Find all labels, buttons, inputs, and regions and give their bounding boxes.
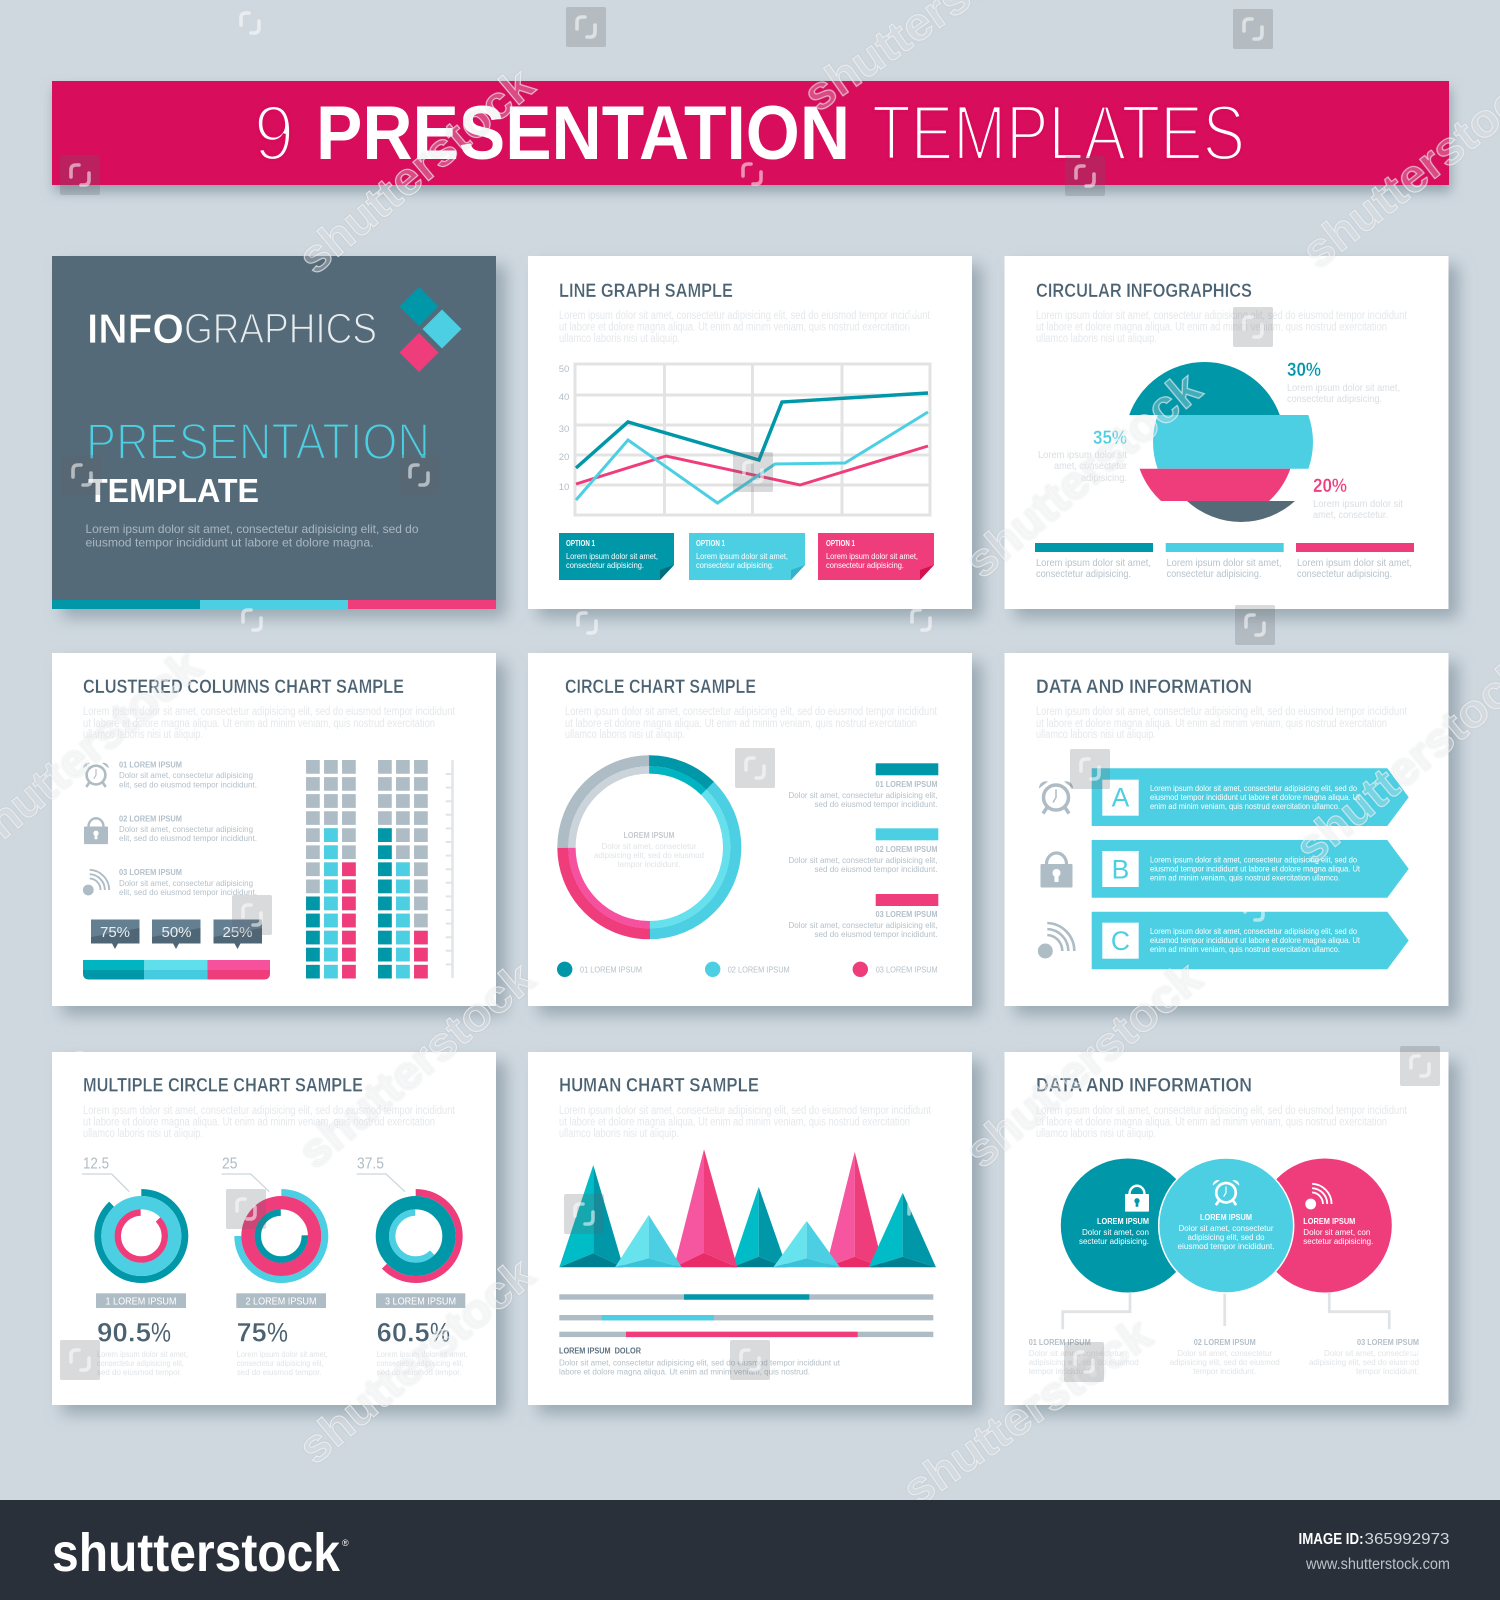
intro text: ut labore et dolore magna aliqua. Ut enim ad minim veniam, quis nostrud exercitation <box>559 1116 910 1128</box>
circle: cyan: adipisicing elit, sed do <box>1188 1233 1265 1242</box>
big percentages: % <box>151 1318 171 1348</box>
intro text: Lorem ipsum dolor sit amet, consectetur adipisicing elit, sed do eiusmod tempor incididunt <box>1036 310 1408 322</box>
arrow A <box>1092 768 1409 826</box>
donut centre text: tempor incididunt. <box>618 860 680 869</box>
percent tags: 75% <box>100 924 130 941</box>
option box 2 <box>689 533 805 580</box>
arrow C: Lorem ipsum dolor sit amet, consectetur adipisicing elit, sed do <box>1150 927 1358 936</box>
callout 20%: Lorem ipsum dolor sit <box>1313 498 1403 510</box>
title: 9 PRESENTATION TEMPLATES: TEMPLATES <box>872 88 1245 176</box>
arrow C: eiusmod tempor incididunt ut labore et dolore magna aliqua. Ut <box>1150 936 1361 945</box>
big percentages: 60.5 <box>377 1318 430 1348</box>
heading: LINE GRAPH SAMPLE <box>559 280 733 302</box>
option box 1: OPTION 1 <box>566 539 595 548</box>
heading: infographics <box>87 305 377 353</box>
legend bars with text: consectetur adipisicing. <box>1166 568 1262 580</box>
chart captions: consectetur adipisicing elit, <box>237 1359 324 1368</box>
clustered columns chart <box>313 760 421 981</box>
intro text: ullamco laboris nisi ut aliquip. <box>559 333 680 345</box>
arrow B: B <box>1112 854 1129 884</box>
circle: cyan: Dolor sit amet, consectetur <box>1178 1224 1274 1233</box>
intro text <box>565 706 938 741</box>
heading: MULTIPLE CIRCLE CHART SAMPLE <box>83 1075 363 1097</box>
bottom legend: 01 LOREM IPSUM <box>580 966 642 975</box>
callout 20% <box>1313 476 1403 521</box>
callout 35%: adipisicing. <box>1081 472 1127 484</box>
big percentages: 90.5 <box>97 1318 151 1348</box>
caption 03: adipisicing elit, sed do eiusmod <box>1309 1358 1419 1367</box>
intro text: ullamco laboris nisi ut aliquip. <box>1036 1128 1156 1140</box>
chart caption: LOREM IPSUM DOLOR <box>559 1346 641 1355</box>
legend bars with text: Lorem ipsum dolor sit amet, <box>1297 557 1412 569</box>
legend bars with text: consectetur adipisicing. <box>1036 568 1131 580</box>
caption 01: 01 LOREM IPSUM <box>1029 1338 1091 1347</box>
intro text: Lorem ipsum dolor sit amet, consectetur adipisicing elit, sed do eiusmod tempor incididunt <box>565 706 938 718</box>
arrow A: eiusmod tempor incididunt ut labore et dolore magna aliqua. Ut <box>1150 793 1361 802</box>
right legend item 01: 01 LOREM IPSUM <box>876 780 938 789</box>
list item 03: 03 LOREM IPSUM <box>119 868 182 877</box>
list item 02: Dolor sit amet, consectetur adipisicing <box>119 825 253 834</box>
right legend item 02: sed do eiusmod tempor incididunt. <box>814 865 938 874</box>
option box 3: consectetur adipisicing. <box>826 561 904 570</box>
list item 02: 02 LOREM IPSUM <box>119 814 182 824</box>
icon: lock <box>84 818 108 844</box>
big percentages: % <box>267 1318 288 1348</box>
option box 2: consectetur adipisicing. <box>696 561 774 570</box>
circle: pink: sectetur adipisicing. <box>1303 1237 1373 1246</box>
intro text: ullamco laboris nisi ut aliquip. <box>565 729 685 741</box>
percent tags <box>91 920 262 949</box>
intro text <box>559 1105 932 1140</box>
list item 01: elit, sed do eiusmod tempor incididunt. <box>119 780 257 790</box>
chart captions: sed do eiusmod tempor. <box>97 1368 182 1377</box>
option box 2: OPTION 1 <box>696 539 725 548</box>
panel: human chart <box>528 1052 972 1405</box>
chart captions: sed do eiusmod tempor. <box>237 1368 322 1377</box>
chart captions: Lorem ipsum dolor sit amet, <box>377 1350 468 1359</box>
circle: cyan: eiusmod tempor incididunt. <box>1178 1242 1274 1251</box>
option box 1: Lorem ipsum dolor sit amet, <box>566 552 658 561</box>
cover description: Lorem ipsum dolor sit amet, consectetur adipisicing elit, sed do <box>86 522 419 536</box>
list item 01: Dolor sit amet, consectetur adipisicing <box>119 771 253 780</box>
option box 3: Lorem ipsum dolor sit amet, <box>826 552 918 561</box>
circle: teal <box>1061 1158 1195 1292</box>
stacked progress bar <box>83 960 270 980</box>
icon: lock <box>1040 853 1072 888</box>
circle: pink: LOREM IPSUM <box>1303 1217 1356 1226</box>
cover description: eiusmod tempor incididunt ut labore et dolore magna. <box>86 536 374 550</box>
list item 03: elit, sed do eiusmod tempor incididunt. <box>119 888 257 897</box>
title banner <box>52 81 1449 185</box>
footer bar <box>0 1500 1500 1600</box>
connector lines <box>1063 1293 1389 1329</box>
intro text <box>83 1105 456 1140</box>
circle: pink <box>1258 1158 1392 1292</box>
right legend item 01 <box>788 763 938 809</box>
circle: pink: Dolor sit amet, con <box>1303 1228 1370 1237</box>
right legend item 03 <box>788 894 938 939</box>
circle: teal: LOREM IPSUM <box>1097 1217 1149 1226</box>
chart caption: labore et dolore magna aliqua. Ut enim ad minim veniam, quis nostrud. <box>559 1368 810 1377</box>
icon: clock <box>1039 781 1073 814</box>
panel: clustered columns chart <box>52 653 496 1006</box>
caption 03: 03 LOREM IPSUM <box>1357 1338 1419 1347</box>
icon: wifi <box>83 870 109 895</box>
caption 02 <box>1170 1338 1280 1376</box>
circle: teal: sectetur adipisicing. <box>1079 1237 1149 1246</box>
caption 01: tempor incididunt. <box>1029 1367 1092 1376</box>
cover colour stripe <box>52 600 496 609</box>
line chart: 10 <box>559 482 569 493</box>
donut chart <box>527 725 772 970</box>
callout 30%: 30% <box>1287 360 1321 381</box>
big percentages: % <box>430 1318 450 1348</box>
callout 35%: amet, consectetur <box>1054 460 1127 472</box>
legend bars with text <box>1035 543 1414 580</box>
intro text: Lorem ipsum dolor sit amet, consectetur adipisicing elit, sed do eiusmod tempor incididunt <box>559 310 931 322</box>
line chart: 30 <box>559 424 569 435</box>
title: 9 PRESENTATION TEMPLATES: PRESENTATION <box>316 91 850 176</box>
range bars <box>559 1294 933 1337</box>
footer image id <box>1298 1531 1450 1573</box>
callout 30% <box>1287 360 1400 405</box>
callout 35% <box>1038 428 1127 484</box>
caption 01 <box>1029 1338 1139 1376</box>
title: 9 PRESENTATION TEMPLATES <box>254 88 1245 176</box>
intro text: ut labore et dolore magna aliqua. Ut enim ad minim veniam, quis nostrud exercitation <box>1036 718 1387 730</box>
chart captions: consectetur adipisicing elit, <box>377 1359 464 1368</box>
chart captions: Lorem ipsum dolor sit amet, <box>237 1350 328 1359</box>
caption 02: tempor incididunt. <box>1193 1367 1256 1376</box>
panel: data and information arrows <box>1004 653 1448 1006</box>
line chart: 40 <box>559 392 569 403</box>
circle: cyan <box>1159 1158 1294 1293</box>
heading: CIRCULAR INFOGRAPHICS <box>1036 280 1252 302</box>
bottom legend <box>557 962 938 977</box>
ring chart 1 <box>98 1192 185 1280</box>
heading: infographics: INFO <box>87 305 184 352</box>
heading: DATA AND INFORMATION <box>1036 1075 1252 1097</box>
intro text <box>83 706 456 741</box>
big percentages <box>97 1318 450 1348</box>
intro text: ullamco laboris nisi ut aliquip. <box>83 729 203 741</box>
watermark text overlay: shutterstock <box>288 57 544 284</box>
intro text: ullamco laboris nisi ut aliquip. <box>1036 729 1156 741</box>
watermark text overlay: shutterstock <box>955 361 1211 588</box>
caption 02: Dolor sit amet, consectetur <box>1177 1349 1273 1358</box>
option box 3: OPTION 1 <box>826 539 855 548</box>
option box 2: Lorem ipsum dolor sit amet, <box>696 552 788 561</box>
chart labels: 2 LOREM IPSUM <box>246 1296 316 1308</box>
list item 01: 01 LOREM IPSUM <box>119 760 182 770</box>
caption 02: 02 LOREM IPSUM <box>1194 1338 1256 1347</box>
arrow B: Lorem ipsum dolor sit amet, consectetur adipisicing elit, sed do <box>1150 855 1358 864</box>
chart captions: Lorem ipsum dolor sit amet, <box>97 1350 188 1359</box>
pyramid chart <box>559 1149 936 1267</box>
option box 3 <box>818 533 934 580</box>
value labels with leaders <box>82 1156 405 1192</box>
panel: circular infographics <box>1004 256 1448 609</box>
watermark text overlay: shutterstock <box>955 951 1211 1178</box>
title: 9 PRESENTATION TEMPLATES: 9 <box>254 88 294 176</box>
percent tags: 25% <box>222 924 253 941</box>
heading: presentation: PRESENTATION <box>86 413 430 470</box>
panel: multiple circle chart <box>52 1052 496 1405</box>
donut centre text: Dolor sit amet, consectetur <box>602 842 697 851</box>
panel: data and information circles <box>1004 1052 1448 1405</box>
bottom legend: 03 LOREM IPSUM <box>876 966 938 975</box>
value labels with leaders: 12.5 <box>83 1156 109 1172</box>
callout 20%: 20% <box>1313 476 1347 497</box>
line chart: 20 <box>559 452 569 463</box>
circle: teal: Dolor sit amet, con <box>1082 1228 1149 1237</box>
legend bars with text: consectetur adipisicing. <box>1297 568 1392 580</box>
option box 1 <box>559 533 674 580</box>
footer logo: shutterstock <box>52 1523 341 1583</box>
callout 20%: amet, consectetur. <box>1313 509 1388 521</box>
intro text: ut labore et dolore magna aliqua. Ut enim ad minim veniam, quis nostrud exercitation <box>1036 1116 1387 1128</box>
intro text: Lorem ipsum dolor sit amet, consectetur adipisicing elit, sed do eiusmod tempor incididunt <box>559 1105 932 1117</box>
panel: circle chart <box>527 653 972 1006</box>
intro text: ut labore et dolore magna aliqua. Ut enim ad minim veniam, quis nostrud exercitation <box>83 1116 435 1128</box>
watermark text overlay: shutterstock <box>288 1247 544 1474</box>
caption 03: tempor incididunt. <box>1356 1367 1419 1376</box>
panel: line graph <box>528 256 972 609</box>
line chart: 50 <box>559 364 569 375</box>
chart captions: sed do eiusmod tempor. <box>377 1368 462 1377</box>
callout 30%: Lorem ipsum dolor sit amet, <box>1287 382 1400 394</box>
intro text <box>559 310 931 345</box>
donut centre text: LOREM IPSUM <box>624 831 675 840</box>
percent tags: 50% <box>161 924 192 941</box>
caption 03 <box>1309 1338 1419 1376</box>
list item 02 <box>119 814 257 843</box>
intro text: ut labore et dolore magna aliqua. Ut enim ad minim veniam, quis nostrud exercitation <box>83 718 435 730</box>
icon: clock <box>83 763 109 787</box>
chart caption: Dolor sit amet, consectetur adipisicing elit, sed do eiusmod tempor incididunt ut <box>559 1359 841 1368</box>
footer image id: www.shutterstock.com <box>1305 1556 1450 1573</box>
intro text: ullamco laboris nisi ut aliquip. <box>559 1128 679 1140</box>
chart labels <box>96 1293 465 1308</box>
chart labels: 1 LOREM IPSUM <box>106 1296 176 1308</box>
intro text: ullamco laboris nisi ut aliquip. <box>1036 333 1157 345</box>
ring chart 3 <box>372 1192 459 1280</box>
arrow A: A <box>1112 783 1130 813</box>
watermark text overlay: shutterstock <box>288 951 544 1178</box>
intro text: Lorem ipsum dolor sit amet, consectetur adipisicing elit, sed do eiusmod tempor incididunt <box>83 706 456 718</box>
heading: template: TEMPLATE <box>88 473 259 510</box>
caption 01: adipisicing elit, sed do eiusmod <box>1029 1358 1139 1367</box>
heading: infographics: GRAPHICS <box>184 305 377 353</box>
intro text: ut labore et dolore magna aliqua. Ut enim ad minim veniam, quis nostrud exercitation <box>559 322 910 334</box>
intro text <box>1036 310 1408 345</box>
arrow A: enim ad minim veniam, quis nostrud exercitation ullamco. <box>1150 802 1340 811</box>
right legend item 03: Dolor sit amet, consectetur adipisicing elit, <box>788 921 938 930</box>
panel: cover slide <box>52 256 496 609</box>
footer image id: 365992973 <box>1364 1531 1450 1548</box>
right legend item 01: Dolor sit amet, consectetur adipisicing elit, <box>788 791 938 800</box>
chart captions <box>97 1350 468 1377</box>
right legend item 02: 02 LOREM IPSUM <box>876 845 938 854</box>
intro text <box>1036 1105 1408 1140</box>
list item 01 <box>119 760 257 790</box>
watermark squares and marks <box>60 7 1440 1382</box>
callout 30%: consectetur adipisicing. <box>1287 393 1382 405</box>
intro text: Lorem ipsum dolor sit amet, consectetur adipisicing elit, sed do eiusmod tempor incididunt <box>1036 706 1408 718</box>
caption 03: Dolor sit amet, consectetur <box>1324 1349 1419 1358</box>
intro text: ullamco laboris nisi ut aliquip. <box>83 1128 203 1140</box>
arrow C: enim ad minim veniam, quis nostrud exercitation ullamco. <box>1150 945 1340 954</box>
chart scale <box>449 760 452 978</box>
big percentages: 75 <box>237 1318 267 1348</box>
icon: wifi <box>1038 923 1074 958</box>
chart caption <box>559 1346 841 1377</box>
circle: cyan: LOREM IPSUM <box>1200 1213 1252 1222</box>
option box 1: consectetur adipisicing. <box>566 561 644 570</box>
sliced circle chart <box>1129 362 1313 522</box>
icon: diamonds <box>400 287 462 372</box>
cover description <box>86 522 419 550</box>
chart captions: consectetur adipisicing elit, <box>97 1359 184 1368</box>
donut centre text: adipisicing elit, sed do eiusmod <box>594 851 704 860</box>
callout 35%: 35% <box>1093 428 1127 449</box>
legend bars with text: Lorem ipsum dolor sit amet, <box>1036 557 1151 569</box>
right legend item 03: sed do eiusmod tempor incididunt. <box>814 930 938 939</box>
arrow B: enim ad minim veniam, quis nostrud exercitation ullamco. <box>1150 873 1340 882</box>
intro text <box>1036 706 1408 741</box>
right legend item 03: 03 LOREM IPSUM <box>876 910 938 919</box>
callout 35%: Lorem ipsum dolor sit <box>1038 449 1127 461</box>
caption 01: Dolor sit amet, consectetur <box>1029 1349 1124 1358</box>
right legend item 02 <box>788 828 938 874</box>
list item 02: elit, sed do eiusmod tempor incididunt. <box>119 834 257 843</box>
value labels with leaders: 25 <box>222 1156 238 1172</box>
heading: HUMAN CHART SAMPLE <box>559 1075 759 1097</box>
list item 03: Dolor sit amet, consectetur adipisicing <box>119 879 253 888</box>
heading: CIRCLE CHART SAMPLE <box>565 676 756 698</box>
ring chart 2 <box>238 1192 325 1280</box>
watermark text overlay: shutterstock <box>893 1307 1161 1516</box>
heading: DATA AND INFORMATION <box>1036 676 1252 698</box>
legend bars with text: Lorem ipsum dolor sit amet, <box>1166 557 1282 569</box>
bottom legend: 02 LOREM IPSUM <box>728 966 790 975</box>
line chart <box>559 364 930 515</box>
arrow C: C <box>1111 926 1130 956</box>
arrow A: Lorem ipsum dolor sit amet, consectetur adipisicing elit, sed do <box>1150 784 1358 793</box>
heading: CLUSTERED COLUMNS CHART SAMPLE <box>83 676 404 698</box>
arrow B <box>1092 840 1409 898</box>
right legend item 02: Dolor sit amet, consectetur adipisicing elit, <box>788 856 938 865</box>
footer registered mark: ® <box>342 1538 349 1548</box>
arrow B: eiusmod tempor incididunt ut labore et dolore magna aliqua. Ut <box>1150 864 1361 873</box>
intro text: Lorem ipsum dolor sit amet, consectetur adipisicing elit, sed do eiusmod tempor incididunt <box>83 1105 456 1117</box>
intro text: ut labore et dolore magna aliqua. Ut enim ad minim veniam, quis nostrud exercitation <box>565 718 917 730</box>
list item 03 <box>119 868 257 897</box>
intro text: Lorem ipsum dolor sit amet, consectetur adipisicing elit, sed do eiusmod tempor incididunt <box>1036 1105 1408 1117</box>
caption 02: adipisicing elit, sed do eiusmod <box>1170 1358 1280 1367</box>
chart labels: 3 LOREM IPSUM <box>385 1296 456 1308</box>
right legend item 01: sed do eiusmod tempor incididunt. <box>814 800 938 809</box>
donut centre text <box>594 831 704 869</box>
value labels with leaders: 37.5 <box>357 1156 384 1172</box>
arrow C <box>1092 912 1409 969</box>
footer image id: IMAGE ID: <box>1298 1531 1364 1548</box>
intro text: ut labore et dolore magna aliqua. Ut enim ad minim veniam, quis nostrud exercitation <box>1036 322 1387 334</box>
